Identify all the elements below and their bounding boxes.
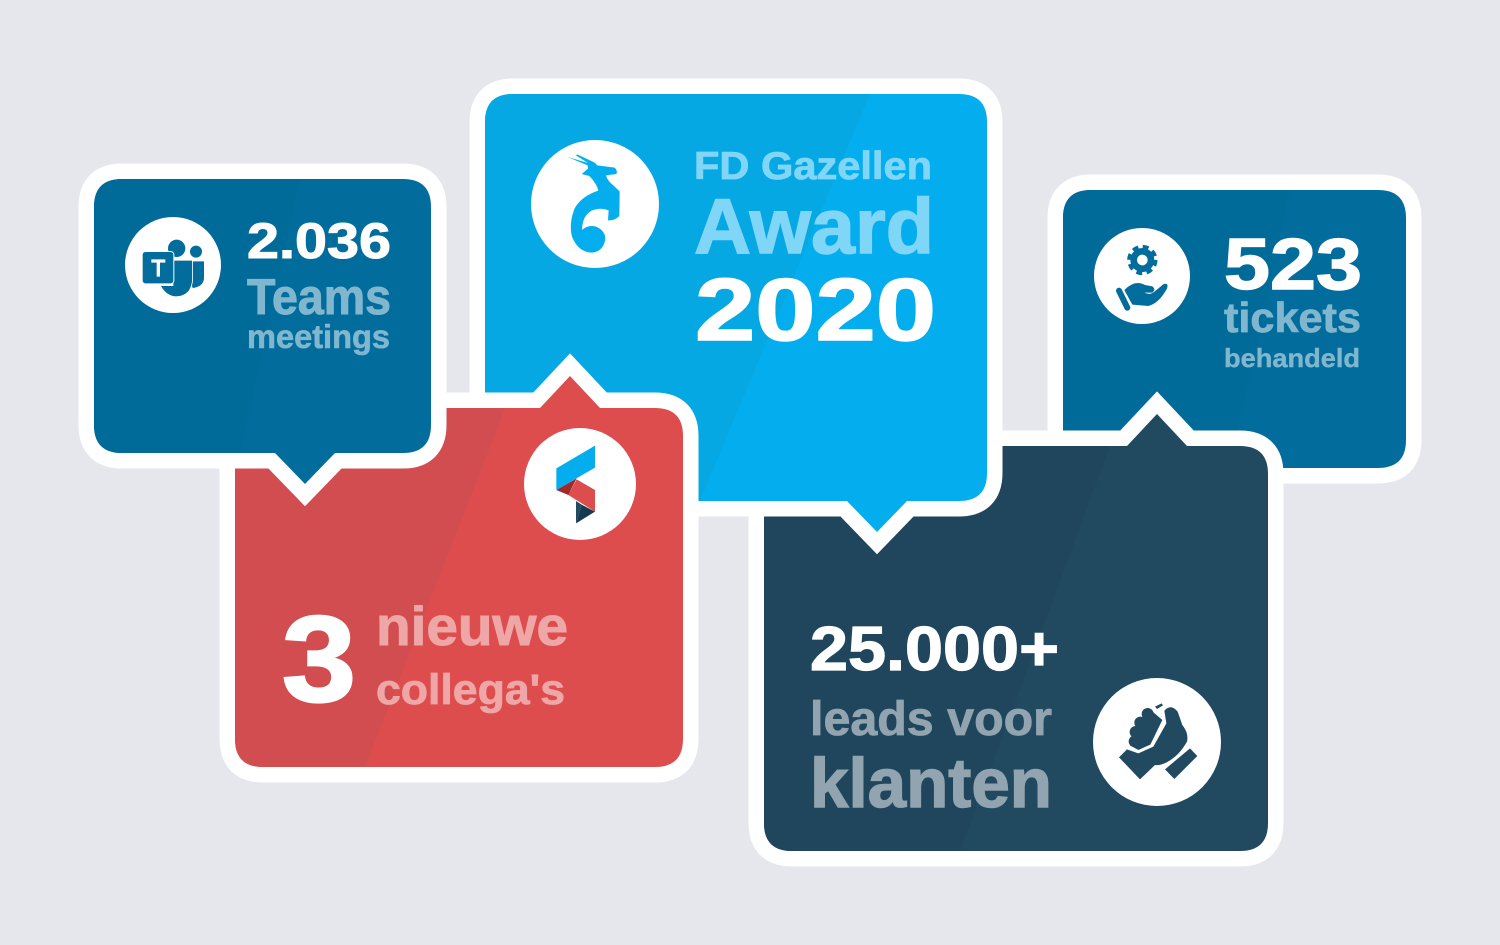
panel: teams meetings bbox=[94, 179, 431, 484]
stat: 2.036 Teams meetings bbox=[247, 213, 391, 355]
icon: company logo bbox=[524, 428, 636, 540]
stat: 523 tickets behandeld: 523 bbox=[1224, 225, 1362, 305]
stat: 3 nieuwe collega's: collega's bbox=[376, 666, 565, 714]
icon: gazelle bbox=[531, 140, 659, 268]
panel: new colleagues bbox=[235, 376, 683, 767]
icon: Teams logo bbox=[125, 217, 221, 313]
stat: 2.036 Teams meetings: Teams bbox=[247, 269, 391, 325]
panel: tickets bbox=[1063, 190, 1406, 468]
stat: 2.036 Teams meetings: meetings bbox=[247, 318, 390, 355]
stat: 523 tickets behandeld bbox=[1224, 225, 1362, 373]
stat: 25.000+ leads voor klanten: klanten bbox=[810, 744, 1052, 822]
stat: 523 tickets behandeld: behandeld bbox=[1224, 343, 1360, 373]
stat: 3 nieuwe collega's: 3 bbox=[282, 591, 356, 727]
stat: FD Gazellen Award 2020: Award bbox=[694, 182, 934, 270]
panel: leads bbox=[764, 414, 1268, 851]
panel: award bbox=[485, 94, 987, 532]
stat: 2.036 Teams meetings: 2.036 bbox=[247, 213, 391, 269]
stat: FD Gazellen Award 2020: FD Gazellen bbox=[694, 145, 932, 188]
stat: 3 nieuwe collega's bbox=[282, 591, 568, 727]
stat: 523 tickets behandeld: tickets bbox=[1224, 294, 1361, 341]
stat: 25.000+ leads voor klanten: leads voor bbox=[810, 693, 1052, 746]
stat: 25.000+ leads voor klanten bbox=[810, 615, 1059, 822]
stat: FD Gazellen Award 2020 bbox=[694, 145, 936, 359]
stat: 25.000+ leads voor klanten: 25.000+ bbox=[810, 615, 1059, 684]
icon: fist bbox=[1093, 678, 1221, 806]
stat: FD Gazellen Award 2020: 2020 bbox=[695, 260, 936, 359]
stat: 3 nieuwe collega's: nieuwe bbox=[376, 595, 568, 657]
icon: gear and hand bbox=[1094, 228, 1190, 324]
